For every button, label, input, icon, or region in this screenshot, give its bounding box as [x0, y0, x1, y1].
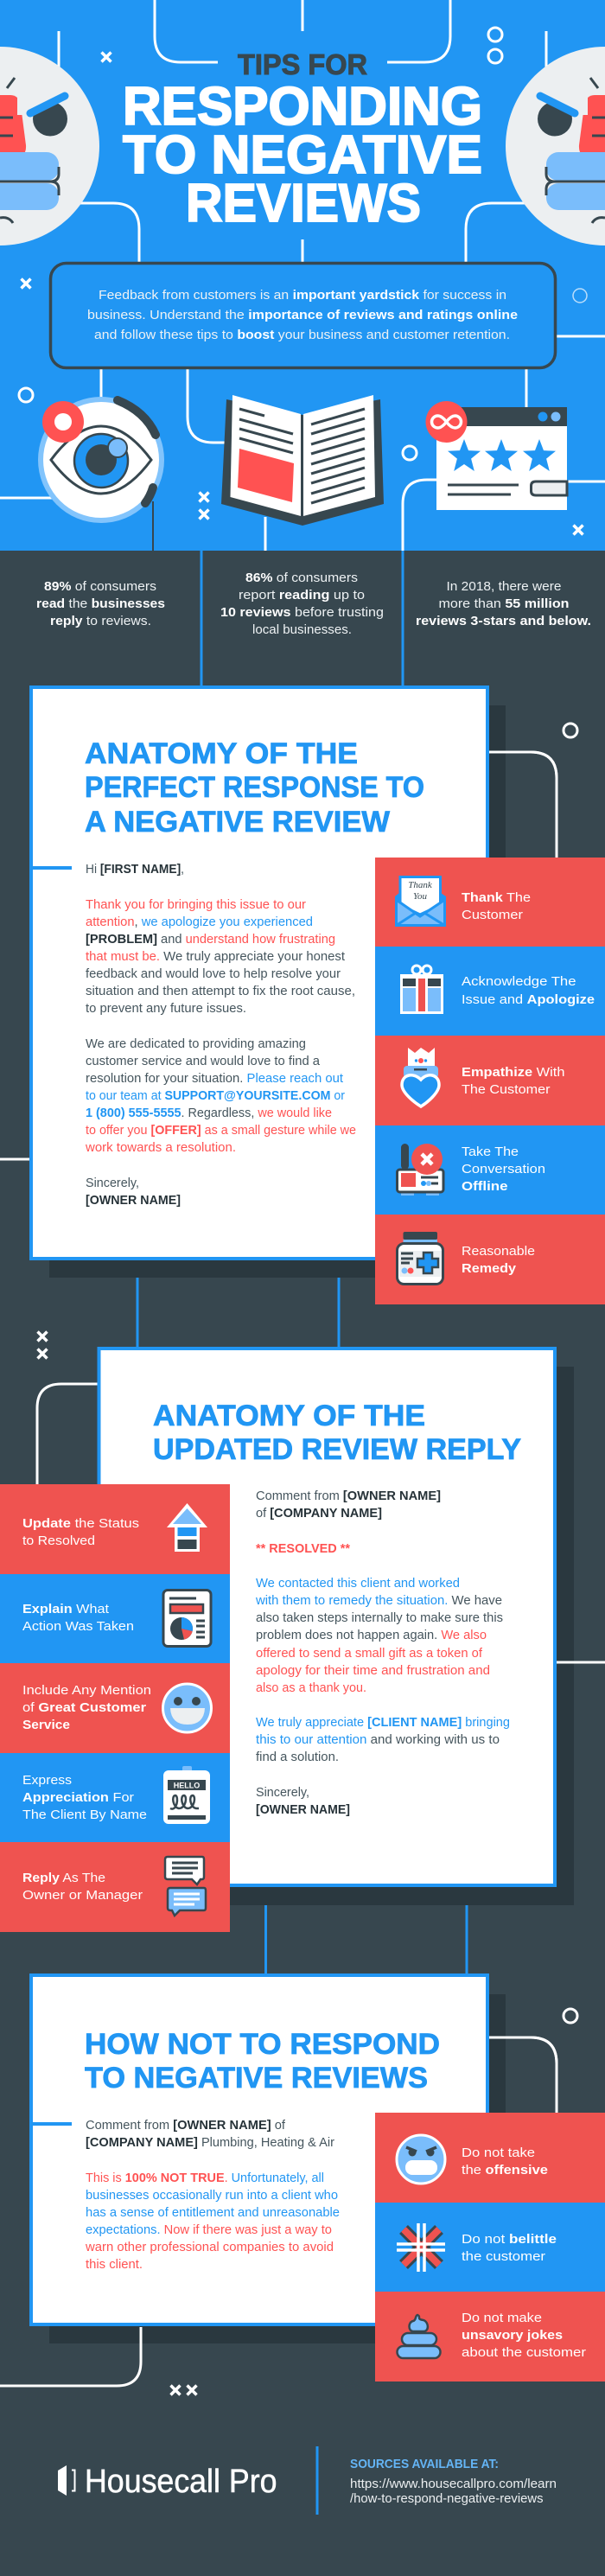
icon: up arrow [167, 1503, 207, 1552]
panel: empathize: The Customer [462, 1082, 550, 1097]
panel: reasonable remedy: Reasonable [462, 1244, 535, 1259]
icon: hello badge [163, 1766, 210, 1824]
text block: bad response: This is 100% NOT TRUE. Unfortunately, all [86, 2171, 324, 2185]
heading: ANATOMY OF THE [85, 737, 358, 770]
title: RESPONDING [123, 77, 482, 137]
panel: acknowledge and apologize [375, 947, 605, 1036]
title: TO NEGATIVE [123, 125, 482, 185]
text block: sample reply: We truly appreciate [CLIENT NAME] bringing [256, 1715, 510, 1730]
stat: 55 million reviews [416, 579, 591, 628]
stat: 55 million reviews: reviews 3-stars and below. [416, 614, 591, 628]
icon: angry face left [0, 47, 99, 245]
text block: sample reply: Comment from [OWNER NAME] [256, 1489, 441, 1503]
intro box: business. Understand the importance of reviews and ratings online [87, 308, 518, 322]
text block: sample reply: apology for their time and frustration and [256, 1663, 490, 1678]
text block: sample reply: [OWNER NAME] [256, 1802, 350, 1817]
intro box: Feedback from customers is an important yardstick for success in [99, 288, 506, 303]
panel: express appreciation [0, 1753, 230, 1842]
text block: sample response: work towards a resolution. [85, 1140, 236, 1155]
sources [350, 2457, 557, 2506]
icon: angry face right [506, 47, 605, 245]
heading: HOW NOT TO RESPOND [85, 2028, 440, 2061]
panel: do not belittle: the customer [462, 2249, 545, 2264]
panel: how not to respond [31, 1975, 557, 2343]
panel: update the status: to Resolved [22, 1533, 95, 1548]
text block: sample response: [OWNER NAME] [86, 1193, 181, 1208]
panel: take the conversation offline: Conversation [462, 1162, 545, 1176]
text block: sample response: customer service and would love to find a [86, 1054, 321, 1068]
text block: sample response: Hi [FIRST NAME], [86, 862, 184, 877]
panel: update the status: Update the Status [22, 1516, 139, 1531]
text block: sample response: to prevent any future issues. [86, 1001, 246, 1016]
text block: bad response: warn other professional companies to avoid [85, 2240, 334, 2254]
panel: thank the customer: Thank The [462, 890, 531, 905]
sources: SOURCES AVAILABLE AT: [350, 2457, 499, 2471]
panel: do not belittle: Do not belittle [462, 2232, 557, 2247]
icon: gift [400, 966, 443, 1014]
text block: sample response: attention, we apologize you experienced [86, 915, 313, 929]
panel: do not take the offensive [375, 2113, 605, 2203]
title: REVIEWS [186, 174, 421, 233]
icon: poop [398, 2315, 441, 2358]
icon: star rating window [425, 401, 567, 510]
text block: sample reply: this to our attention and working with us to [256, 1732, 500, 1747]
panel: do not make unsavory jokes: about the customer [462, 2345, 586, 2360]
text block: sample reply: ** RESOLVED ** [256, 1541, 350, 1556]
icon: thank you envelope: Thank [408, 880, 433, 890]
icon: report [163, 1591, 211, 1646]
panel: express appreciation: Appreciation For [22, 1790, 134, 1805]
panel: express appreciation: The Client By Name [22, 1808, 147, 1822]
icon: thank you envelope: You [413, 891, 428, 902]
panel: take the conversation offline: Offline [462, 1179, 508, 1194]
panel: express appreciation: Express [22, 1773, 72, 1788]
panel: take the conversation offline [375, 1125, 605, 1215]
panel: do not belittle [375, 2203, 605, 2292]
text block: bad response [85, 2118, 340, 2272]
text block: sample response [85, 862, 356, 1208]
heading [85, 2028, 440, 2095]
panel: do not make unsavory jokes [375, 2292, 605, 2382]
stat: 86% of consumers: local businesses. [252, 622, 352, 637]
icon: eye [38, 397, 164, 523]
icon: smiley [162, 1684, 211, 1732]
heading: PERFECT RESPONSE TO [85, 771, 424, 804]
heading: ANATOMY OF THE [153, 1400, 425, 1432]
panel: reasonable remedy [375, 1215, 605, 1304]
text block: bad response: Comment from [OWNER NAME] of [86, 2118, 286, 2133]
panel: acknowledge and apologize: Acknowledge The [462, 974, 576, 989]
text block: sample response: to offer you [OFFER] as a small gesture while we [86, 1123, 356, 1138]
text block: sample reply [255, 1489, 510, 1817]
heading: UPDATED REVIEW REPLY [153, 1433, 521, 1466]
stat: 89% of consumers [36, 579, 165, 628]
text block: sample response: to our team at SUPPORT@YOURSITE.COM or [86, 1088, 345, 1103]
stat: 86% of consumers: report reading up to [239, 588, 365, 603]
text block: sample response: [PROBLEM] and understand how frustrating [86, 932, 335, 947]
stat: 86% of consumers: 10 reviews before trusting [220, 605, 384, 620]
panel: take the conversation offline: Take The [462, 1145, 519, 1159]
stat: 89% of consumers: 89% of consumers [44, 579, 156, 594]
text block: sample response: Sincerely, [86, 1176, 139, 1190]
panel: update the status [0, 1484, 230, 1574]
panel: thank the customer: Customer [462, 908, 523, 922]
panel: reply as owner [0, 1842, 230, 1932]
panel: empathize: Empathize With [462, 1065, 565, 1080]
stat: 55 million reviews: more than 55 million [439, 596, 570, 611]
text block: sample reply: of [COMPANY NAME] [256, 1506, 382, 1521]
stat: 86% of consumers [220, 571, 384, 637]
intro box [50, 263, 555, 368]
logo: Housecall Pro: Housecall Pro [85, 2464, 277, 2500]
text block: sample response: Thank you for bringing this issue to our [86, 897, 306, 912]
text block: sample reply: offered to send a small gift as a token of [256, 1646, 483, 1661]
icon: speech bubbles [165, 1857, 206, 1916]
heading [85, 737, 424, 838]
text block: sample response: situation and then attempt to fix the root cause, [86, 984, 355, 998]
title: TIPS FOR [238, 48, 367, 80]
text block: sample reply: find a solution. [256, 1750, 339, 1764]
text block: sample response: resolution for your situation. Please reach out [86, 1071, 344, 1086]
text block: sample reply: We contacted this client and worked [256, 1576, 460, 1591]
panel: thank the customer [375, 858, 605, 947]
panel: great customer service: Include Any Mention [22, 1683, 151, 1698]
panel: do not take the offensive: the offensive [462, 2163, 548, 2177]
text block: bad response: [COMPANY NAME] Plumbing, Heating & Air [86, 2135, 334, 2150]
title [123, 48, 482, 233]
stat: 89% of consumers: reply to reviews. [50, 614, 151, 628]
text block: bad response: this client. [86, 2257, 143, 2272]
text block: sample reply: problem does not happen again. We also [256, 1628, 487, 1642]
icon: hello badge: HELLO [174, 1781, 200, 1789]
stat: 86% of consumers: 86% of consumers [245, 571, 358, 585]
panel: acknowledge and apologize: Issue and Apologize [462, 992, 595, 1007]
panel: anatomy of the updated review reply [99, 1349, 574, 1905]
heading [153, 1400, 521, 1466]
heading: TO NEGATIVE REVIEWS [85, 2062, 428, 2095]
text block: sample reply: also as a thank you. [256, 1680, 366, 1695]
icon: belittle cross [397, 2223, 445, 2272]
panel: do not make unsavory jokes: unsavory jokes [462, 2328, 563, 2343]
panel: great customer service [0, 1663, 230, 1753]
panel: empathize [375, 1036, 605, 1125]
text block: bad response: expectations. Now if there was just a way to [86, 2222, 332, 2237]
panel: do not make unsavory jokes: Do not make [462, 2311, 542, 2325]
panel: explain what action was taken [0, 1574, 230, 1663]
text block: sample response: that must be. We truly appreciate your honest [86, 949, 346, 964]
panel: great customer service: of Great Customer [22, 1700, 146, 1715]
icon: offline phone [398, 1144, 443, 1196]
panel: reply as owner: Owner or Manager [22, 1888, 143, 1903]
panel: great customer service: Service [22, 1718, 70, 1732]
icon: thank you envelope [395, 877, 446, 927]
icon: medicine bottle [398, 1232, 443, 1285]
panel: explain what action was taken: Action Was Taken [22, 1619, 134, 1634]
panel: explain what action was taken: Explain What [22, 1602, 110, 1616]
icon: open book [221, 395, 384, 526]
panel: anatomy of the perfect response [31, 687, 557, 1278]
stat: 55 million reviews: In 2018, there were [446, 579, 562, 594]
heading: A NEGATIVE REVIEW [85, 806, 391, 838]
text block: bad response: businesses occasionally run into a client who [86, 2188, 338, 2203]
sources: https://www.housecallpro.com/learn [350, 2477, 557, 2491]
stat: 89% of consumers: read the businesses [36, 596, 165, 611]
text block: sample reply: with them to remedy the situation. We have [255, 1593, 502, 1608]
text block: sample reply: also taken steps internally to make sure this [256, 1610, 503, 1625]
text block: bad response: has a sense of entitlement and unreasonable [86, 2205, 340, 2220]
text block: sample response: We are dedicated to providing amazing [86, 1036, 306, 1051]
panel: do not take the offensive: Do not take [462, 2146, 535, 2160]
panel: reasonable remedy: Remedy [462, 1261, 517, 1276]
intro box: and follow these tips to boost your business and customer retention. [94, 328, 510, 342]
icon: heart with crown [402, 1048, 439, 1106]
sources: /how-to-respond-negative-reviews [350, 2491, 543, 2506]
text block: sample response: 1 (800) 555-5555. Regardless, we would like [86, 1106, 332, 1120]
text block: sample reply: Sincerely, [256, 1785, 309, 1800]
panel: reply as owner: Reply As The [22, 1871, 105, 1885]
icon: angry emoji [397, 2135, 445, 2184]
text block: sample response: feedback and would love to help resolve your [86, 966, 341, 981]
